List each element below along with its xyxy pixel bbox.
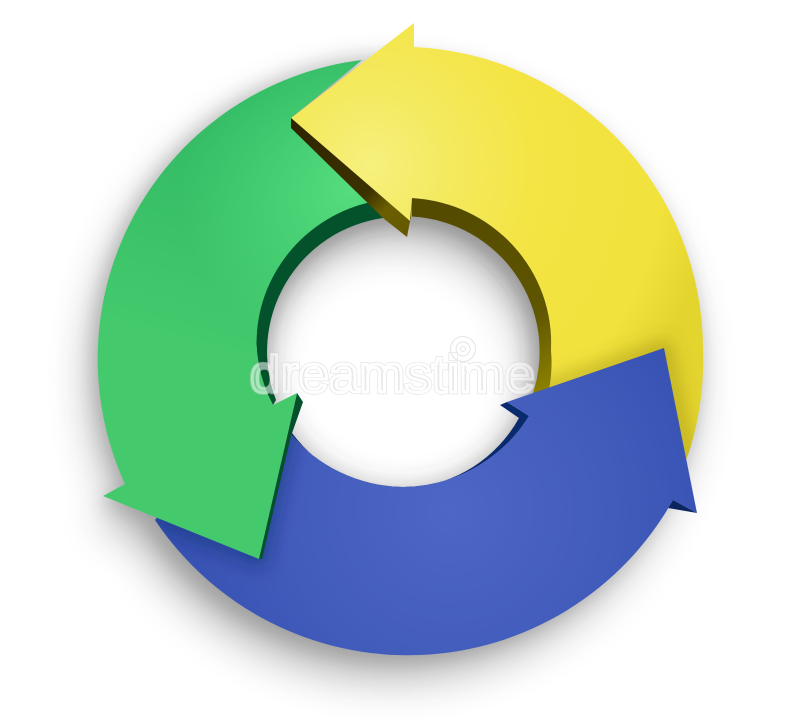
green inner wall [256,198,383,405]
yellow inner wall [412,198,552,393]
drop shadow [88,55,701,681]
blue inner wall [290,402,529,488]
green arrow [98,60,381,559]
green arrow barb wall [259,393,303,559]
watermark: dreamstime [250,346,535,404]
blue lower barb wall [668,500,697,513]
blue arrow [150,348,697,655]
watermark: dreamstime [250,346,535,404]
yellow arrow [291,23,703,470]
yellow arrow side wall [291,118,412,237]
cycle diagram [66,23,718,702]
